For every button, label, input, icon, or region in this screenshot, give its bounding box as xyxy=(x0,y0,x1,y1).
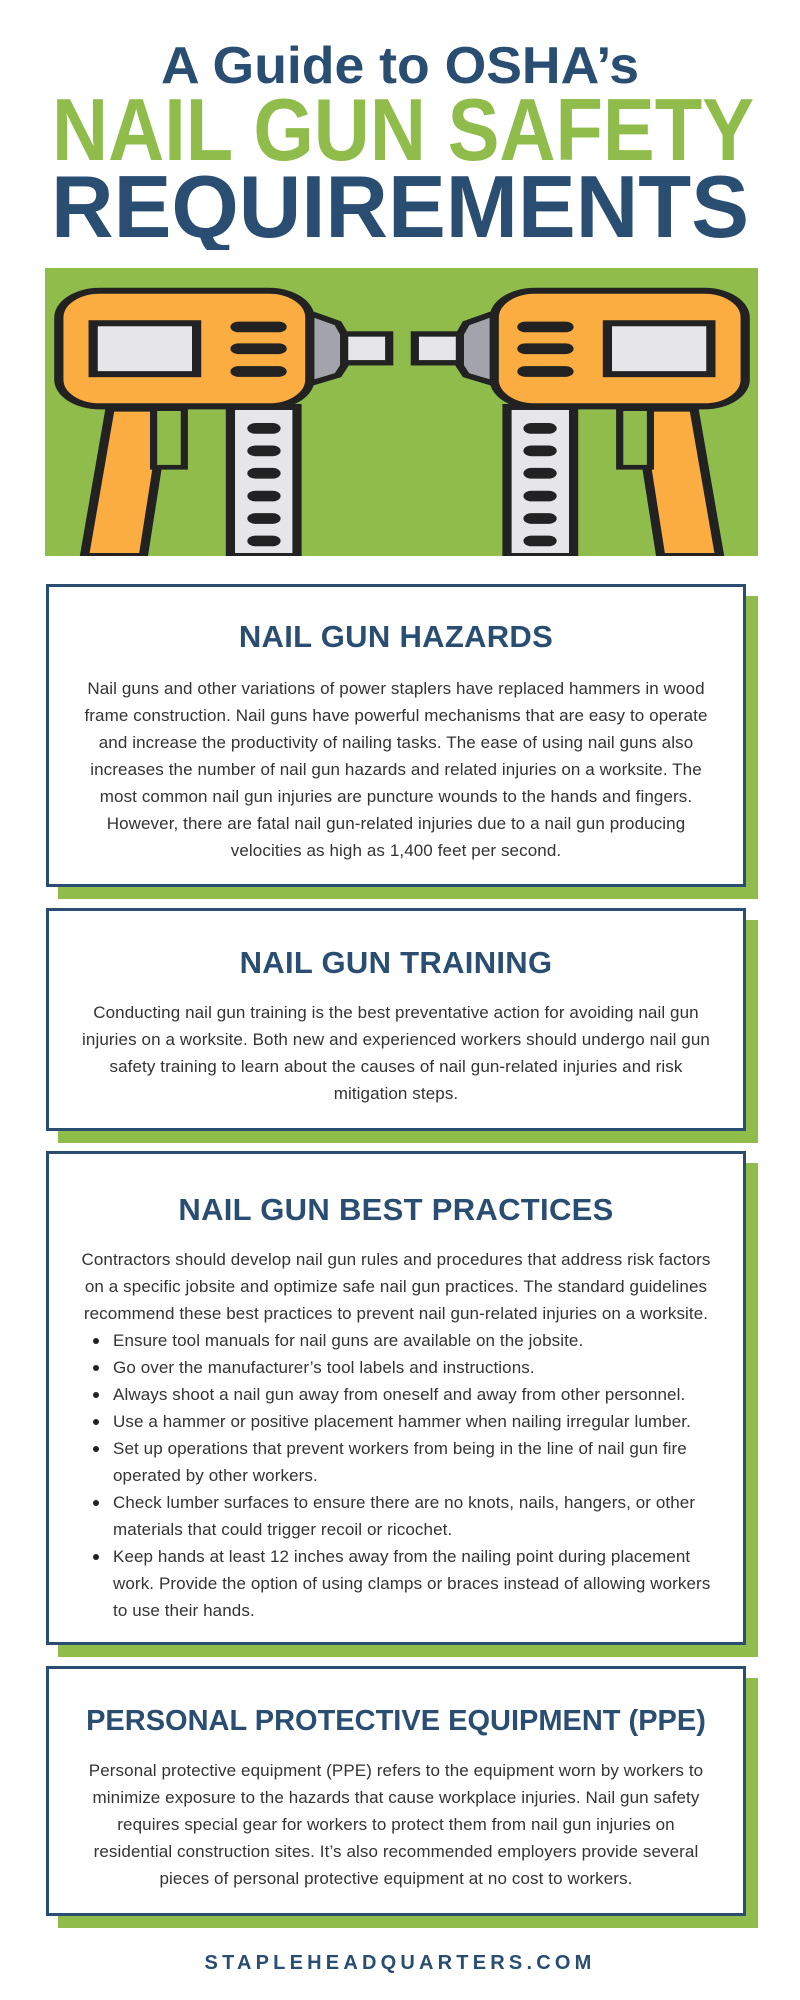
panel: best practices xyxy=(46,1151,758,1657)
heading: training: NAIL GUN TRAINING xyxy=(240,945,552,980)
text: hazards body: Nail guns and other variations of power staplers have replaced hammers in wood xyxy=(87,679,705,698)
text: best practices intro and list: Go over the manufacturer’s tool labels and instructions. xyxy=(113,1358,535,1377)
text: best practices intro and list: Contractors should develop nail gun rules and procedures that address risk factors xyxy=(81,1250,711,1269)
text: PPE body xyxy=(89,1761,703,1888)
text: hazards body: increases the number of nail gun hazards and related injuries on a worksite. The xyxy=(90,760,702,779)
text: hazards body: most common nail gun injuries are puncture wounds to the hands and fingers. xyxy=(100,787,692,806)
text: training body: mitigation steps. xyxy=(334,1084,458,1103)
heading: hazards: NAIL GUN HAZARDS xyxy=(239,619,553,654)
text: PPE body: residential construction sites. It’s also recommended employers provide several xyxy=(94,1842,698,1861)
text: hazards body: frame construction. Nail guns have powerful mechanisms that are easy to operate xyxy=(84,706,708,725)
heading: best practices: NAIL GUN BEST PRACTICES xyxy=(178,1192,614,1227)
text: PPE body: requires special gear for workers to protect them from nail gun injuries on xyxy=(117,1815,675,1834)
text: best practices intro and list: to use their hands. xyxy=(113,1601,255,1620)
text: best practices intro and list: Ensure tool manuals for nail guns are available on the jobsite. xyxy=(113,1331,583,1350)
panel: nail gun training xyxy=(46,908,758,1143)
panel: nail gun hazards xyxy=(46,584,758,899)
text: hazards body: However, there are fatal nail gun-related injuries due to a nail gun producing xyxy=(107,814,685,833)
text: best practices intro and list: Use a hammer or positive placement hammer when nailing irregular lumber. xyxy=(113,1412,691,1431)
text: training body: safety training to learn about the causes of nail gun-related injuries and risk xyxy=(109,1057,682,1076)
text: hazards body: velocities as high as 1,400 feet per second. xyxy=(231,841,561,860)
text: best practices intro and list: materials that could trigger recoil or ricochet. xyxy=(113,1520,452,1539)
text: training body: injuries on a worksite. Both new and experienced workers should undergo nail gun xyxy=(82,1030,710,1049)
text: best practices intro and list: Keep hands at least 12 inches away from the nailing point during placement xyxy=(113,1547,690,1566)
panel: personal protective equipment xyxy=(46,1666,758,1928)
text: PPE body: Personal protective equipment (PPE) refers to the equipment worn by workers to xyxy=(89,1761,703,1780)
text: best practices intro and list: Always shoot a nail gun away from oneself and away from other personnel. xyxy=(113,1385,685,1404)
text: best practices intro and list: recommend these best practices to prevent nail gun-related injuries on a worksite. xyxy=(84,1304,708,1323)
text: best practices intro and list xyxy=(81,1250,711,1620)
text: training body xyxy=(82,1003,710,1103)
text: PPE body: minimize exposure to the hazards that cause workplace injuries. Nail gun safety xyxy=(92,1788,699,1807)
text: hazards body xyxy=(84,679,708,860)
title: A Guide to OSHA’s xyxy=(161,37,639,95)
text: hazards body: and increase the productivity of nailing tasks. The ease of using nail guns also xyxy=(99,733,693,752)
heading: PPE: PERSONAL PROTECTIVE EQUIPMENT (PPE) xyxy=(86,1705,706,1737)
text: best practices intro and list: Check lumber surfaces to ensure there are no knots, nails, hangers, or other xyxy=(113,1493,695,1512)
text: PPE body: pieces of personal protective equipment at no cost to workers. xyxy=(159,1869,632,1888)
text: training body: Conducting nail gun training is the best preventative action for avoiding nail gun xyxy=(93,1003,699,1022)
text: best practices intro and list: Set up operations that prevent workers from being in the line of nail gun fire xyxy=(113,1439,687,1458)
text: best practices intro and list: operated by other workers. xyxy=(113,1466,318,1485)
title xyxy=(51,37,754,250)
text: best practices intro and list: on a specific jobsite and optimize safe nail gun practices. The standard guidelines xyxy=(85,1277,707,1296)
text: best practices intro and list: work. Provide the option of using clamps or braces instead of allowing workers xyxy=(113,1574,710,1593)
footer: website: STAPLEHEADQUARTERS.COM xyxy=(205,1952,595,1974)
illustration: two nail guns xyxy=(45,268,758,556)
